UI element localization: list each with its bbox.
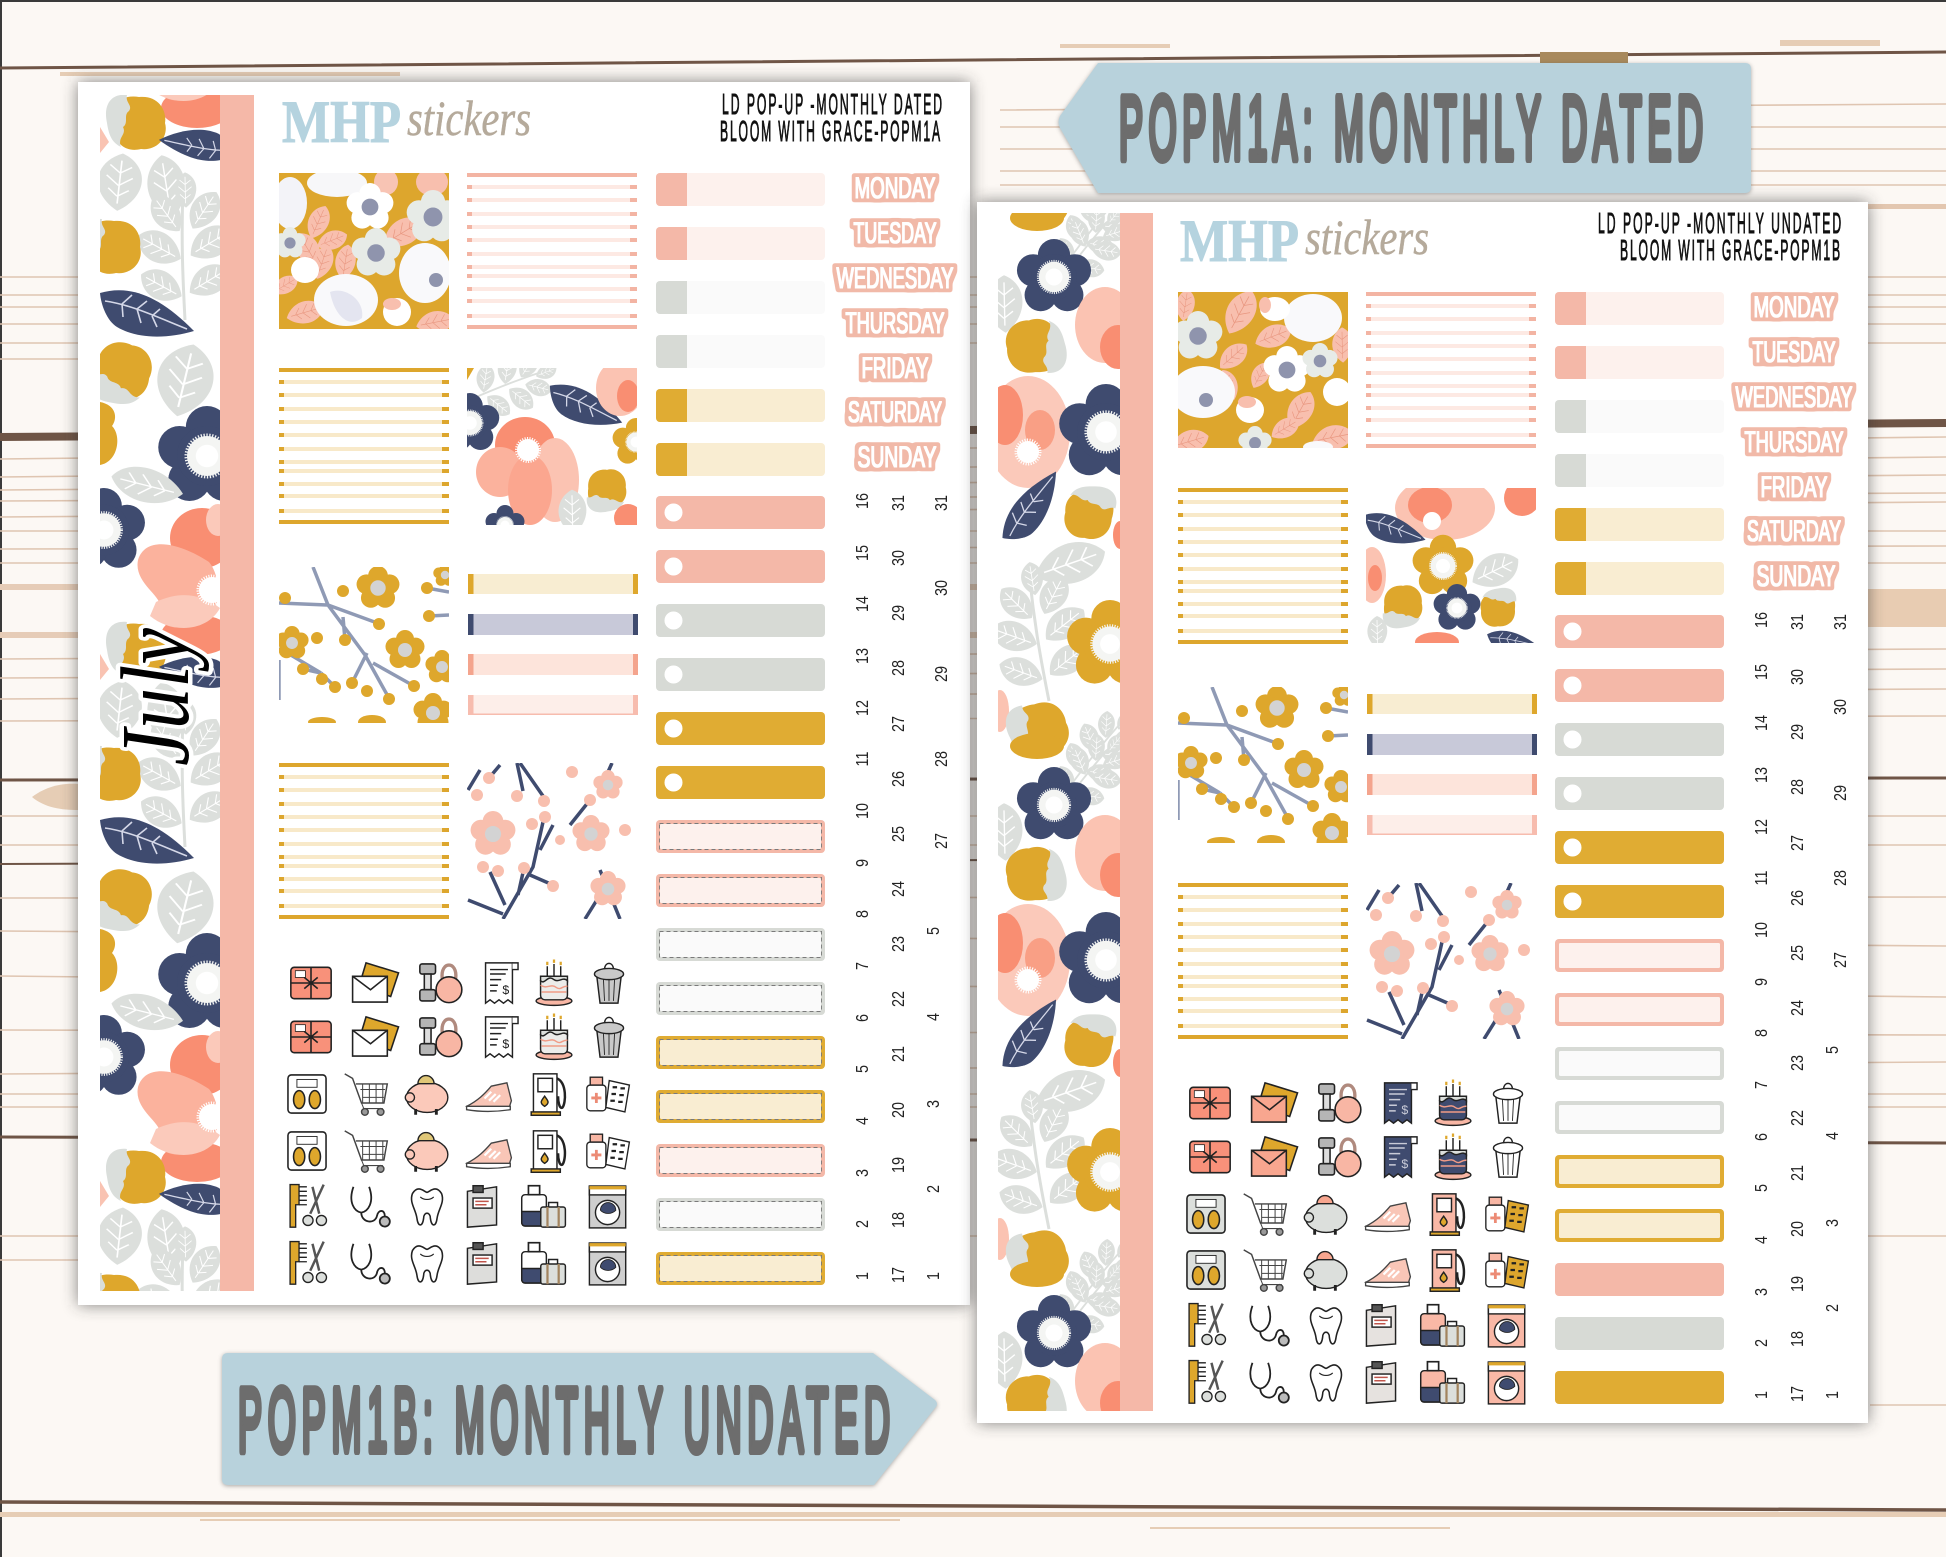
date numbers column 2 A: 20 [889, 1102, 908, 1118]
date numbers column 1 B: 11 [1752, 871, 1771, 885]
date numbers column 2 B: 31 [1788, 614, 1807, 630]
weekday labels A: TUESDAY [854, 217, 936, 250]
dot stickers B [1555, 615, 1724, 918]
weekday labels B: THURSDAY [1744, 426, 1844, 459]
logo A: stickers [407, 90, 531, 146]
icon row: comb and scissors, stethoscope, tooth, passport, luggage, washer [290, 1185, 626, 1228]
sheet A: POPM1A monthly dated [63, 0, 970, 1374]
date numbers column 2 A: 31 [889, 495, 908, 511]
icon row B: package, mail, weights, bill, cake, trash (second) [1190, 1133, 1523, 1179]
weekday labels A: SUNDAY [858, 441, 936, 474]
date numbers column 1 B: 5 [1752, 1184, 1771, 1192]
arrow sign: POPM1A monthly dated [1058, 63, 1751, 194]
date numbers column 1 B: 4 [1752, 1236, 1771, 1244]
date numbers column 3 A: 1 [924, 1272, 943, 1280]
outlined stickers B [1555, 939, 1724, 1242]
date numbers column 1 B: 6 [1752, 1133, 1771, 1141]
date numbers column 1 A: 14 [853, 596, 872, 612]
weekday labels A [836, 172, 954, 474]
date numbers column 1 B: 12 [1752, 819, 1771, 835]
date numbers column 1 B: 13 [1752, 767, 1771, 783]
date numbers column 2 B: 19 [1788, 1276, 1807, 1292]
square: peach floral A [467, 368, 637, 525]
date numbers column 3 B: 30 [1831, 699, 1850, 715]
date numbers column 3 A: 2 [924, 1185, 943, 1193]
sheet B: POPM1B monthly undated [966, 190, 1879, 1435]
date numbers column 1 B: 14 [1752, 715, 1771, 731]
date numbers column 3 A: 5 [924, 927, 943, 935]
square: gold berry branches A [275, 563, 459, 731]
date numbers column 3 B: 29 [1831, 785, 1850, 801]
icon row: package, mail, weights, bill, cake, trash [291, 959, 624, 1005]
date numbers column 2 B: 23 [1788, 1055, 1807, 1071]
logo A [282, 89, 531, 155]
icon row: scale, cart, piggy bank, shoe, gas pump, medicine [288, 1074, 629, 1115]
date numbers column 2 B: 24 [1788, 1000, 1807, 1016]
logo B: MHP [1180, 208, 1299, 274]
date numbers column 2 A: 21 [889, 1046, 908, 1062]
icon row B: scale, cart, piggy bank, shoe, gas pump, medicine [1187, 1194, 1528, 1235]
sheet title A [720, 88, 942, 148]
sheet title B: LD POP-UP -MONTHLY UNDATED [1598, 207, 1841, 240]
date numbers column 2 B: 20 [1788, 1221, 1807, 1237]
arrow sign: POPM1B monthly undated [222, 1353, 937, 1486]
weekday labels A: THURSDAY [846, 307, 944, 340]
square: peach floral B [1366, 488, 1536, 643]
icon row: scale, cart, piggy bank, shoe, gas pump, medicine (second) [288, 1131, 629, 1172]
date numbers column 1 A: 7 [853, 962, 872, 970]
date numbers column 1 A: 8 [853, 910, 872, 918]
square: gold floral B [1178, 292, 1348, 448]
stripe stickers B [1367, 694, 1537, 835]
date numbers column 1 A: 12 [853, 700, 872, 716]
weekday labels B [1736, 291, 1852, 593]
date numbers column 2 B: 22 [1788, 1110, 1807, 1126]
date numbers column 2 A: 23 [889, 936, 908, 952]
date numbers column 3 B: 5 [1823, 1046, 1842, 1054]
sheet title A: LD POP-UP -MONTHLY DATED [722, 88, 942, 121]
date numbers column 3 A: 28 [932, 751, 951, 767]
square: gold berry branches B [1174, 683, 1358, 851]
date numbers column 3 B: 3 [1823, 1219, 1842, 1227]
square: gold lined 2 A [279, 763, 449, 919]
date numbers column 1 A [853, 493, 872, 1280]
icon row: comb and scissors, stethoscope, tooth, passport, luggage, washer (second) [290, 1242, 626, 1285]
date numbers column 3 B: 1 [1823, 1391, 1842, 1399]
date numbers column 2 A: 25 [889, 826, 908, 842]
icon row: package, mail, weights, bill, cake, trash (second) [291, 1013, 624, 1059]
date numbers column 2 A: 27 [889, 716, 908, 732]
date numbers column 2 A: 29 [889, 605, 908, 621]
date numbers column 1 A: 15 [853, 545, 872, 561]
date numbers column 1 A: 9 [853, 859, 872, 867]
date numbers column 3 A: 3 [924, 1100, 943, 1108]
date numbers column 1 B: 9 [1752, 978, 1771, 986]
square: gold lined B [1178, 488, 1348, 644]
date numbers column 2 A: 24 [889, 881, 908, 897]
sheet title B [1598, 207, 1841, 267]
date numbers column 2 B: 25 [1788, 945, 1807, 961]
date numbers column 2 B: 27 [1788, 835, 1807, 851]
solid stickers B [1555, 1263, 1724, 1404]
date numbers column 2 A [889, 495, 908, 1283]
date numbers column 1 B: 16 [1752, 612, 1771, 628]
date numbers column 1 A: 16 [853, 493, 872, 509]
date numbers column 1 A: 6 [853, 1014, 872, 1022]
month script: July: July [102, 628, 210, 766]
date numbers column 3 A: 27 [932, 833, 951, 849]
date numbers column 2 B: 30 [1788, 669, 1807, 685]
pink side band B [1120, 213, 1153, 1411]
date numbers column 3 A [924, 495, 951, 1280]
date numbers column 2 B [1788, 614, 1807, 1402]
date numbers column 3 A: 29 [932, 666, 951, 682]
weekday labels B: SATURDAY [1747, 515, 1841, 548]
square: gold lined A [279, 368, 449, 524]
icon grid B [1187, 1079, 1528, 1404]
date numbers column 3 B: 28 [1831, 870, 1850, 886]
icon row B: comb and scissors, stethoscope, tooth, passport, luggage, washer (second) [1189, 1361, 1525, 1404]
date numbers column 1 A: 13 [853, 648, 872, 664]
logo B [1180, 208, 1429, 274]
date numbers column 3 A: 30 [932, 580, 951, 596]
date numbers column 2 A: 19 [889, 1157, 908, 1173]
date numbers column 1 A: 5 [853, 1065, 872, 1073]
date numbers column 2 B: 21 [1788, 1165, 1807, 1181]
date numbers column 1 A: 10 [853, 803, 872, 819]
square: pink lined B [1366, 292, 1536, 448]
date numbers column 1 B: 2 [1752, 1339, 1771, 1347]
weekday labels A: WEDNESDAY [836, 262, 954, 295]
tab stickers B [1555, 292, 1724, 595]
date numbers column 1 A: 11 [853, 752, 872, 766]
date numbers column 2 B: 26 [1788, 890, 1807, 906]
date numbers column 2 A: 17 [889, 1267, 908, 1283]
date numbers column 3 B: 2 [1823, 1304, 1842, 1312]
square: gold floral A [279, 173, 449, 329]
sheet title A: BLOOM WITH GRACE-POPM1A [720, 115, 940, 148]
floral side strip A [100, 95, 220, 1291]
sheet title B: BLOOM WITH GRACE-POPM1B [1620, 234, 1840, 267]
date numbers column 2 A: 18 [889, 1212, 908, 1228]
date numbers column 2 A: 22 [889, 991, 908, 1007]
square: pink blossom branches B [1366, 883, 1536, 1039]
date numbers column 3 A: 31 [932, 495, 951, 511]
date numbers column 1 B [1752, 612, 1771, 1399]
logo A: MHP [282, 89, 401, 155]
date numbers column 3 A: 4 [924, 1013, 943, 1021]
icon row B: scale, cart, piggy bank, shoe, gas pump, medicine (second) [1187, 1250, 1528, 1291]
date numbers column 1 A: 3 [853, 1169, 872, 1177]
arrow sign: POPM1A monthly dated: POPM1A: MONTHLY DATED [1119, 78, 1703, 179]
date numbers column 1 B: 3 [1752, 1288, 1771, 1296]
date numbers column 2 A: 28 [889, 660, 908, 676]
weekday labels B: WEDNESDAY [1736, 381, 1852, 414]
date numbers column 2 B: 28 [1788, 779, 1807, 795]
date numbers column 2 A: 30 [889, 550, 908, 566]
square: pink lined A [467, 173, 637, 329]
logo B: stickers [1305, 209, 1429, 265]
date numbers column 3 B: 4 [1823, 1132, 1842, 1140]
stripe stickers A [468, 574, 638, 715]
date numbers column 1 B: 1 [1752, 1391, 1771, 1399]
weekday labels B: TUESDAY [1752, 336, 1836, 369]
square: gold lined 2 B [1178, 883, 1348, 1039]
date numbers column 2 B: 18 [1788, 1331, 1807, 1347]
date numbers column 2 A: 26 [889, 771, 908, 787]
icon row B: package, mail, weights, bill, cake, trash [1190, 1079, 1523, 1125]
date numbers column 1 B: 10 [1752, 922, 1771, 938]
date numbers column 2 B: 29 [1788, 724, 1807, 740]
weekday labels A: FRIDAY [862, 352, 928, 385]
date numbers column 3 B: 27 [1831, 952, 1850, 968]
dot stickers A [656, 496, 825, 799]
date numbers column 2 B: 17 [1788, 1386, 1807, 1402]
date numbers column 3 B [1823, 614, 1850, 1399]
date numbers column 1 B: 7 [1752, 1081, 1771, 1089]
arrow sign: POPM1B monthly undated: POPM1B: MONTHLY UNDATED [238, 1370, 890, 1471]
pink side band A [220, 95, 254, 1291]
date numbers column 1 A: 1 [853, 1272, 872, 1280]
floral side strip B [998, 213, 1120, 1411]
tab stickers A [656, 173, 825, 476]
date numbers column 1 B: 15 [1752, 664, 1771, 680]
weekday labels A: MONDAY [854, 172, 936, 205]
date numbers column 3 B: 31 [1831, 614, 1850, 630]
weekday labels B: SUNDAY [1756, 560, 1836, 593]
dashed stickers A [656, 820, 825, 1285]
weekday labels B: MONDAY [1754, 291, 1834, 324]
date numbers column 1 B: 8 [1752, 1029, 1771, 1037]
weekday labels A: SATURDAY [848, 396, 942, 429]
icon row B: comb and scissors, stethoscope, tooth, passport, luggage, washer [1189, 1304, 1525, 1347]
icon grid A [288, 959, 629, 1285]
square: pink blossom branches A [467, 763, 637, 919]
date numbers column 1 A: 4 [853, 1117, 872, 1125]
date numbers column 1 A: 2 [853, 1220, 872, 1228]
weekday labels B: FRIDAY [1760, 471, 1828, 504]
